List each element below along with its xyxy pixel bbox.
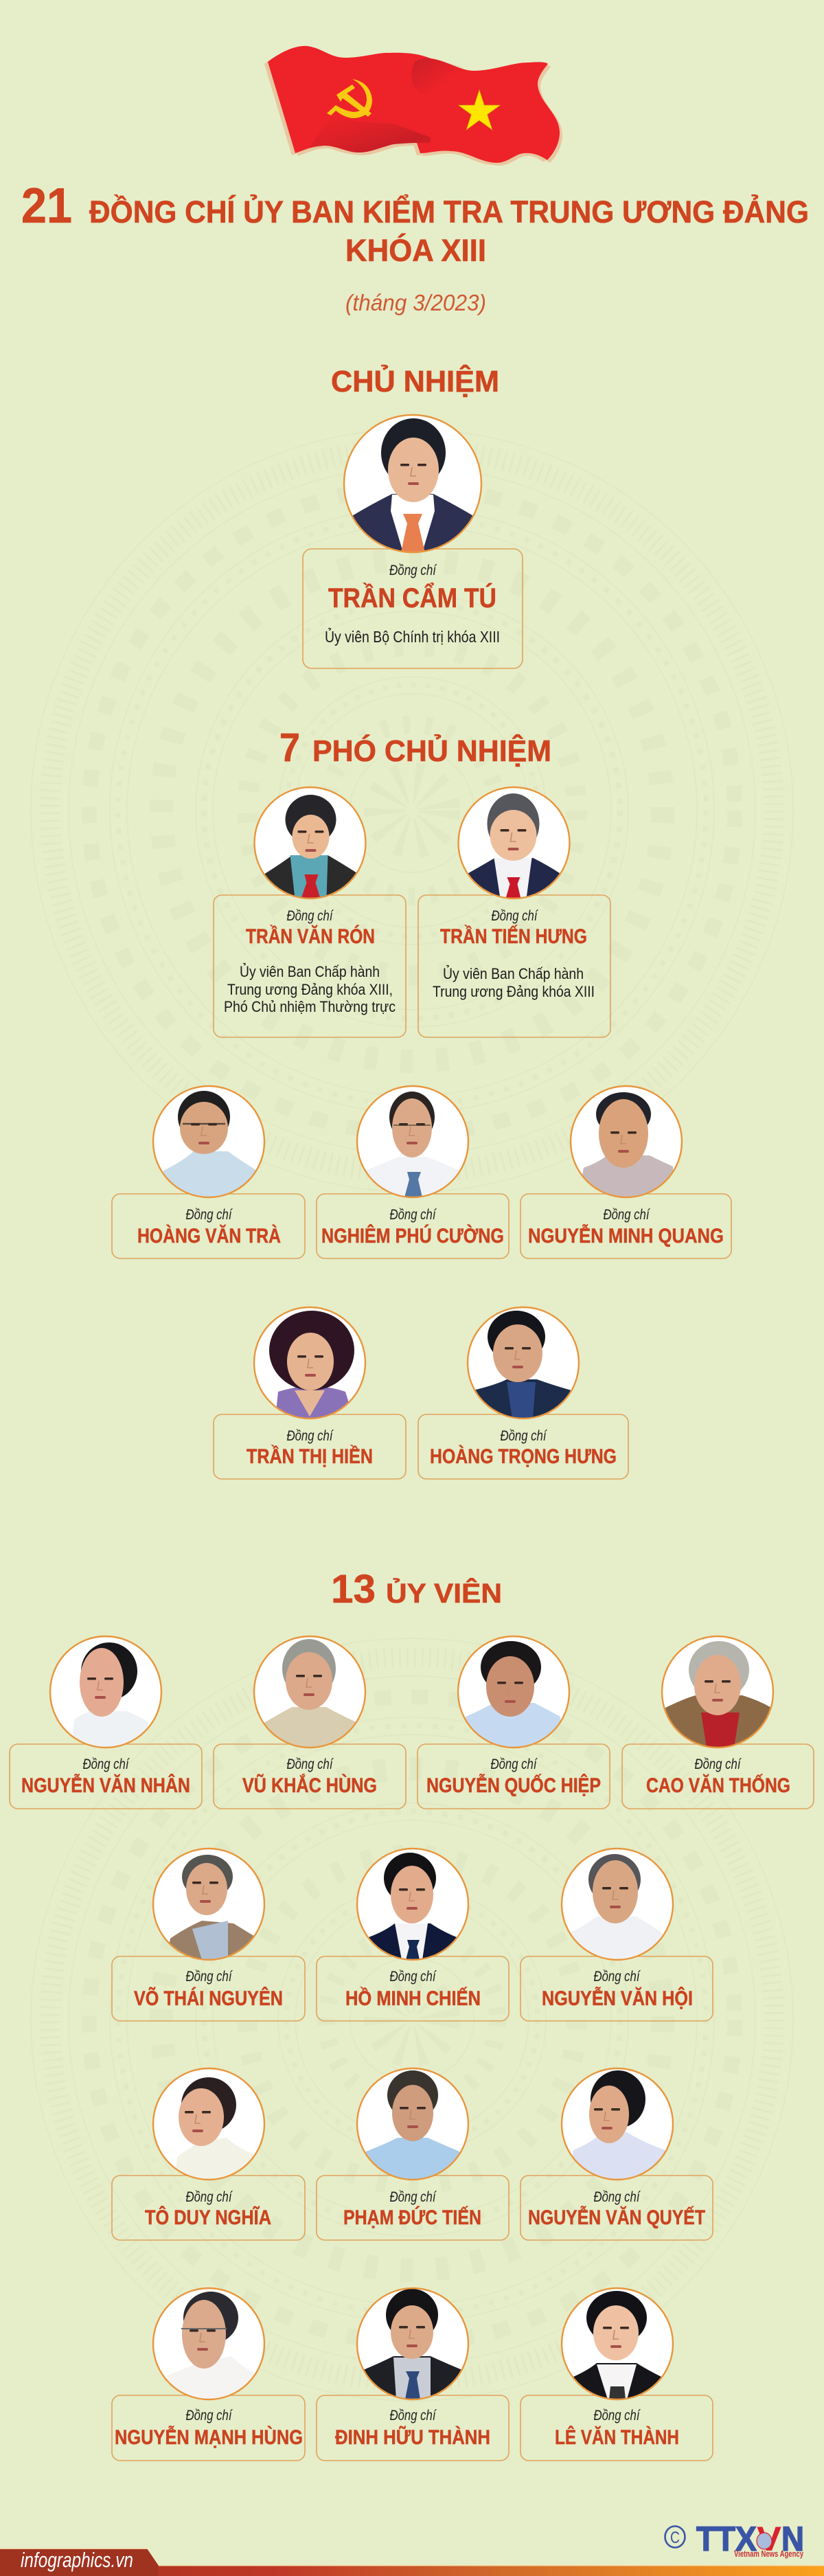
name box: Đồng chí <box>287 1428 334 1444</box>
name box: Đồng chí <box>500 1428 547 1444</box>
member card: Nguyễn Quốc Hiệp <box>417 1636 610 1809</box>
name box: Trung ương Đảng khóa XIII <box>433 983 595 1000</box>
name box: Đồng chí <box>593 2408 641 2424</box>
name box: NGUYỄN VĂN HỘI <box>542 1987 693 2010</box>
member card: Hoàng Trọng Hưng <box>418 1307 628 1479</box>
name box: HỒ MINH CHIẾN <box>345 1987 481 2010</box>
watermark: lower bronze drum <box>31 1638 793 2401</box>
portrait <box>458 1636 569 1748</box>
portrait <box>571 1086 682 1197</box>
name box: Trung ương Đảng khóa XIII, <box>227 981 393 998</box>
name box <box>417 1744 610 1809</box>
name box: Đồng chí <box>492 908 538 924</box>
name box: HOÀNG VĂN TRÀ <box>137 1224 281 1247</box>
portrait <box>344 415 481 552</box>
name box: Đồng chí <box>287 908 334 924</box>
name box: Đồng chí <box>185 2189 233 2205</box>
icon: yellow star <box>459 90 500 130</box>
member card: Nguyễn Minh Quang <box>520 1086 731 1258</box>
name box <box>622 1744 814 1809</box>
portrait <box>468 1307 579 1419</box>
name box <box>303 549 523 668</box>
name box: TÔ DUY NGHĨA <box>145 2206 271 2229</box>
member card: Trần Văn Rón <box>214 787 406 1037</box>
portrait <box>562 2288 673 2399</box>
member card: Nguyễn Văn Quyết <box>520 2068 713 2240</box>
name box: NGUYỄN MINH QUANG <box>528 1224 724 1247</box>
name box: LÊ VĂN THÀNH <box>555 2426 679 2449</box>
name box <box>418 895 610 1037</box>
name box <box>214 1414 406 1479</box>
portrait <box>562 1849 673 1960</box>
name box: Đồng chí <box>82 1756 130 1772</box>
name box <box>112 1194 305 1258</box>
name box: Đồng chí <box>287 1756 334 1772</box>
name box <box>520 1194 731 1258</box>
member card: Trần Tiến Hưng <box>418 787 610 1037</box>
name box: Đồng chí <box>390 2408 437 2424</box>
name box: Đồng chí <box>389 563 437 578</box>
name box <box>317 2395 509 2461</box>
member card: Cao Văn Thống <box>622 1636 814 1809</box>
name box: VÕ THÁI NGUYÊN <box>134 1987 283 2010</box>
name box: NGUYỄN VĂN QUYẾT <box>528 2206 705 2229</box>
member card: Trần Cẩm Tú <box>303 415 523 668</box>
member card: Nguyễn Mạnh Hùng <box>112 2288 305 2461</box>
name box: HOÀNG TRỌNG HƯNG <box>430 1445 617 1468</box>
member card: Tô Duy Nghĩa <box>112 2068 305 2240</box>
name box: VŨ KHẮC HÙNG <box>242 1774 377 1797</box>
portrait <box>562 2068 673 2180</box>
name box <box>112 2176 305 2240</box>
member card: Phạm Đức Tiến <box>317 2068 509 2240</box>
name box <box>10 1744 202 1809</box>
portrait <box>153 1849 264 1960</box>
portrait <box>661 1636 774 1748</box>
logo: TTXVN Vietnam News Agency: N <box>781 2520 804 2558</box>
heading: 7 vice chairmen: 7 <box>279 725 300 770</box>
logo: TTXVN Vietnam News Agency: Vietnam News Agency <box>734 2549 803 2559</box>
name box: NGUYỄN QUỐC HIỆP <box>426 1774 601 1797</box>
member card: Hoàng Văn Trà <box>112 1086 305 1258</box>
name box: Đồng chí <box>185 1969 233 1985</box>
name box: Ủy viên Bộ Chính trị khóa XIII <box>325 626 500 646</box>
name box: Ủy viên Ban Chấp hành <box>443 965 584 982</box>
member card: Hồ Minh Chiến <box>317 1849 509 2021</box>
date subtitle: (tháng 3/2023) <box>345 290 486 315</box>
member card: Nghiêm Phú Cường <box>317 1086 509 1258</box>
watermark: upper bronze drum <box>31 429 793 1192</box>
name box: Đồng chí <box>603 1207 650 1223</box>
name box: Đồng chí <box>185 1207 233 1223</box>
name box: NGUYỄN VĂN NHÂN <box>21 1774 190 1797</box>
name box: NGUYỄN MẠNH HÙNG <box>115 2426 303 2449</box>
member card: Võ Thái Nguyên <box>112 1849 305 2021</box>
name box: NGHIÊM PHÚ CƯỜNG <box>321 1224 504 1247</box>
name box: PHẠM ĐỨC TIẾN <box>343 2206 481 2229</box>
name box: Phó Chủ nhiệm Thường trực <box>224 998 396 1015</box>
name box <box>317 2176 509 2240</box>
name box <box>418 1414 628 1479</box>
icon: party and national flag <box>264 46 562 166</box>
member card: Trần Thị Hiền <box>214 1307 406 1479</box>
portrait <box>254 1636 365 1748</box>
name box <box>317 1956 509 2021</box>
logo: TTXVN Vietnam News Agency <box>665 2520 804 2559</box>
footer tab <box>0 2549 159 2576</box>
name box: Đồng chí <box>390 1969 437 1985</box>
name box: Đồng chí <box>593 1969 641 1985</box>
member card: Vũ Khắc Hùng <box>214 1636 406 1809</box>
title: 21 <box>21 179 72 234</box>
portrait <box>153 2288 264 2399</box>
name box <box>317 1194 509 1258</box>
logo: TTXVN Vietnam News Agency: V <box>757 2520 782 2558</box>
footer bar <box>0 2548 824 2576</box>
heading: 13 members: 13 <box>331 1567 376 1612</box>
portrait <box>357 2068 468 2180</box>
member card: Nguyễn Văn Nhân <box>10 1636 202 1809</box>
name box: Đồng chí <box>695 1756 742 1772</box>
portrait <box>50 1636 161 1748</box>
heading: 13 members: ỦY VIÊN <box>386 1577 502 1609</box>
portrait <box>153 2068 264 2180</box>
name box: Đồng chí <box>390 1207 437 1223</box>
icon: hammer and sickle <box>327 79 372 118</box>
heading: 7 vice chairmen <box>279 725 551 770</box>
member card: Đinh Hữu Thành <box>317 2288 509 2461</box>
portrait <box>153 1086 264 1197</box>
name box <box>214 1744 406 1809</box>
name box: TRẦN CẨM TÚ <box>328 581 496 613</box>
portrait <box>357 2288 468 2399</box>
member card: Lê Văn Thành <box>520 2288 713 2461</box>
name box: TRẦN VĂN RÓN <box>246 925 375 948</box>
name box: Đồng chí <box>490 1756 538 1772</box>
name box: Đồng chí <box>593 2189 641 2205</box>
heading: 13 members <box>331 1567 502 1612</box>
name box: Đồng chí <box>185 2408 233 2424</box>
portrait <box>357 1086 468 1197</box>
name box: Ủy viên Ban Chấp hành <box>240 963 380 980</box>
name box <box>214 895 406 1037</box>
name box <box>112 2395 305 2461</box>
portrait <box>459 787 570 899</box>
logo: TTXVN Vietnam News Agency: C <box>670 2529 680 2547</box>
name box: Đồng chí <box>390 2189 437 2205</box>
heading: chairman: CHỦ NHIỆM <box>331 363 499 398</box>
name box: ĐINH HỮU THÀNH <box>335 2426 490 2449</box>
member card: Nguyễn Văn Hội <box>520 1849 713 2021</box>
title: KHÓA XIII <box>345 233 486 268</box>
heading: 7 vice chairmen: PHÓ CHỦ NHIỆM <box>312 733 551 768</box>
name box <box>520 2176 713 2240</box>
site name: infographics.vn <box>21 2548 133 2572</box>
logo: TTXVN Vietnam News Agency: TTX <box>696 2520 757 2558</box>
name box <box>520 1956 713 2021</box>
name box <box>520 2395 713 2461</box>
portrait <box>357 1849 468 1960</box>
name box <box>112 1956 305 2021</box>
name box: TRẦN TIẾN HƯNG <box>440 925 587 948</box>
portrait <box>254 787 365 899</box>
title <box>21 179 809 268</box>
name box: CAO VĂN THỐNG <box>646 1774 790 1797</box>
name box: TRẦN THỊ HIỀN <box>247 1445 373 1468</box>
portrait <box>254 1307 365 1419</box>
